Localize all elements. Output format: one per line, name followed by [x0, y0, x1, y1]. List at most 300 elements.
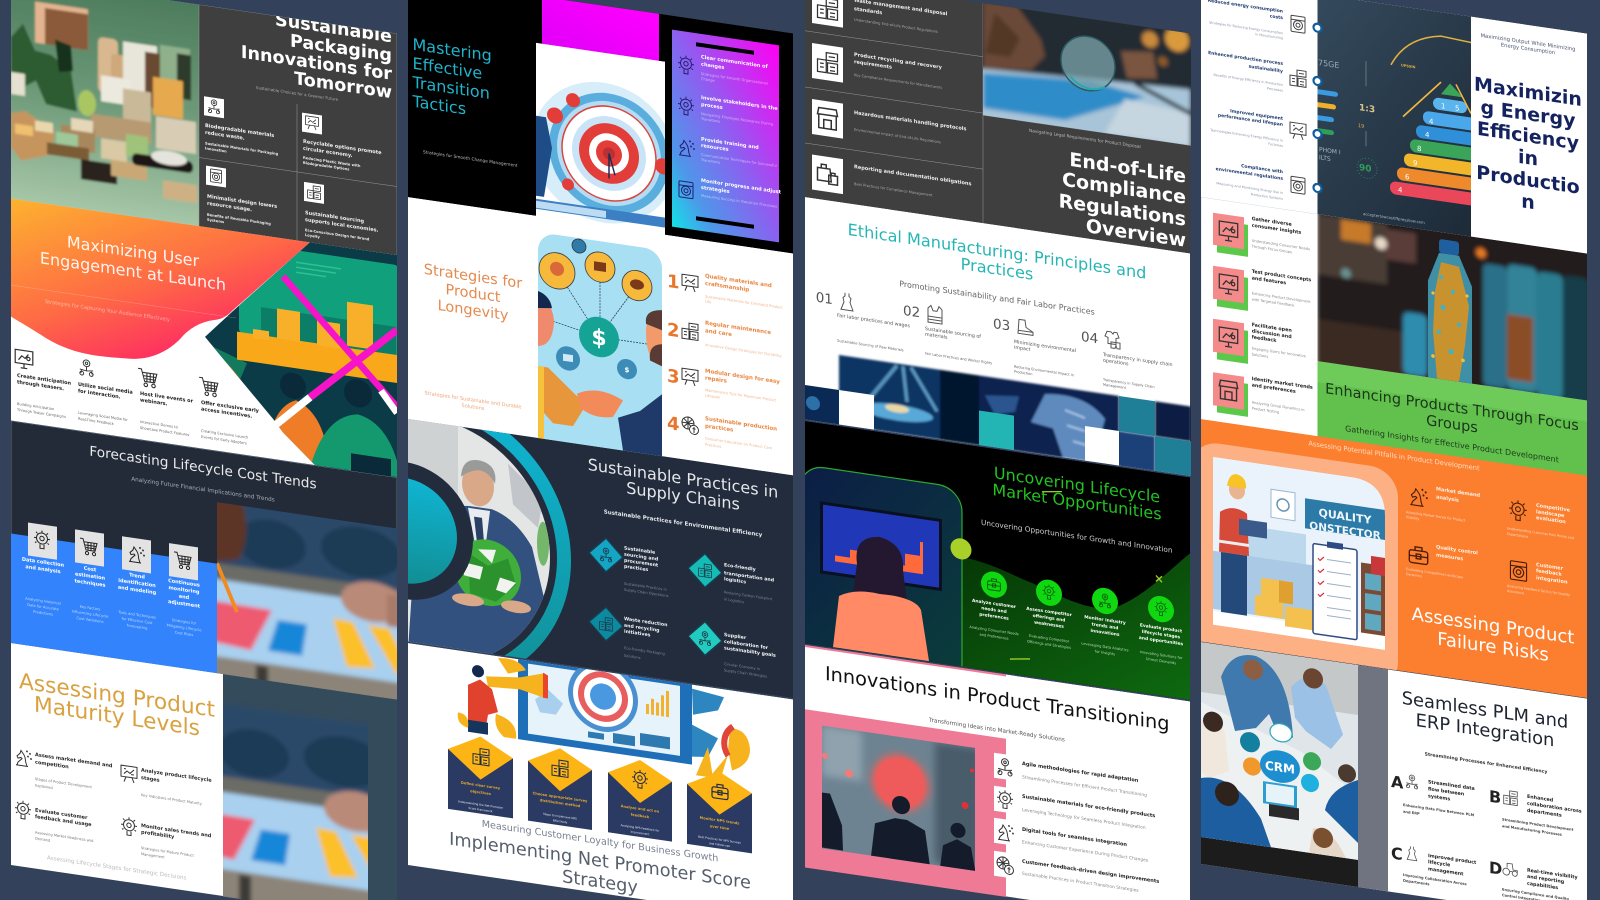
numbers — [816, 290, 1098, 347]
item text: supports local economies. — [305, 217, 379, 234]
item text — [16, 373, 260, 447]
item text: Assess market demand and — [35, 752, 113, 769]
item text: webinars. — [140, 397, 168, 407]
item text: Eco-friendly — [724, 562, 756, 573]
photo: energy pyramid dashboard: 4 — [1425, 130, 1430, 140]
item text: feedback — [1536, 568, 1562, 578]
NPS cards: Choose appropriate survey — [533, 791, 588, 803]
photo: plastic bottles — [1317, 209, 1592, 409]
item text: Assurance — [1507, 589, 1524, 595]
decorative accents — [1010, 484, 1162, 681]
item text: Analyzing Consumer Needs — [969, 625, 1019, 636]
item text: Transparency in supply chain — [1102, 352, 1173, 368]
item text: Interactive Demos to — [140, 420, 179, 430]
item text: Host live events or — [140, 391, 194, 405]
item text: Through Focus Groups — [1251, 244, 1292, 254]
left item list: Technologies Enhancing Energy Efficiency in — [1209, 128, 1283, 143]
item text: Facilitate open — [1252, 322, 1292, 334]
NPS cards: Analyzing NPS Feedback for — [621, 823, 660, 833]
item text: for Insights — [1095, 649, 1115, 656]
item text: and Preferences — [979, 633, 1009, 641]
item text: Analyze product lifecycle — [141, 768, 212, 784]
icons — [841, 292, 1120, 350]
panel: packaging benefits — [199, 0, 397, 256]
item text: Monitor industry — [1084, 614, 1126, 626]
item text: Continuous — [168, 578, 200, 589]
item text: Sustainable Materials for Packaging — [205, 141, 279, 156]
title: Enhancing Products Through Focus — [1325, 380, 1579, 434]
item text — [35, 752, 212, 866]
illustration: handshake network: $ — [625, 365, 630, 374]
item text: Improved product — [1428, 853, 1477, 866]
title: Productio — [1476, 161, 1580, 199]
photo: chart with pencil — [217, 502, 397, 700]
item text: Identify market trends — [1252, 376, 1313, 391]
photo: energy pyramid dashboard: 8 — [1417, 144, 1421, 153]
compliance rows: Environmental Impact of End-of-Life Regulations — [854, 128, 941, 144]
title: Packaging — [290, 31, 392, 66]
item text: Real-time visibility — [1527, 867, 1578, 881]
item text: procurement — [624, 558, 659, 569]
photo: energy pyramid dashboard: 1:3 — [1359, 103, 1375, 115]
gradient panel: Strategies for Smooth Organizational — [701, 72, 768, 86]
item text: Strategies for Mature Product — [141, 846, 194, 858]
item text: Consumer Education on Product Care — [705, 437, 773, 450]
numbers: 1 — [667, 271, 680, 294]
item text: Innovative Design Strategies for Durability — [705, 343, 782, 358]
NPS cards: distribution method — [540, 798, 581, 808]
item text: Assessing Market Trends for Product — [1406, 510, 1466, 523]
item text: Customer — [1536, 562, 1564, 572]
title: Overview — [1086, 214, 1186, 252]
item text — [1403, 776, 1582, 900]
item text: Gather diverse — [1252, 216, 1292, 228]
item text: Unmet Demands — [1146, 657, 1176, 665]
teal ring — [290, 383, 564, 697]
left item list: costs — [1270, 13, 1283, 21]
gradient panel: Transitions — [700, 117, 720, 124]
title: Forecasting Lifecycle Cost Trends — [89, 444, 317, 493]
item text: Competitive — [1536, 503, 1571, 514]
item text: identification — [118, 578, 156, 589]
item text: estimation — [75, 571, 105, 582]
item text: Key Factors — [80, 605, 100, 612]
gradient panel: Navigating Employee Resistance During — [701, 112, 773, 126]
item text: innovations — [1091, 628, 1120, 638]
icon tiles — [28, 522, 198, 580]
slide: Sustainable Practices in Supply Chains — [290, 383, 793, 730]
title: Compliance — [1062, 168, 1186, 209]
illustration: quality inspector: ONSTECTOR — [1309, 520, 1381, 542]
title: Engagement at Launch — [40, 248, 226, 294]
slide: Uncovering Lifecycle Market Opportunities — [800, 420, 1190, 721]
NPS cards: Improvement — [631, 830, 650, 836]
column 3 of slides — [800, 0, 1200, 900]
icon tiles — [994, 753, 1015, 879]
NPS cards: Steps to Implement NPS — [543, 812, 577, 821]
NPS cards: Understanding the Net Promoter — [458, 799, 504, 810]
item text: for interaction. — [78, 388, 121, 401]
magenta block — [542, 0, 659, 64]
numbers: 4 — [667, 413, 680, 436]
photo: energy pyramid dashboard: 90 — [1359, 163, 1372, 175]
photo: energy pyramid dashboard: 4 — [1429, 116, 1434, 126]
item text: through teasers. — [17, 379, 64, 392]
item text: landscape — [1536, 509, 1565, 519]
item text: Sustainable Materials for Extended Product — [705, 295, 783, 310]
left item list: Strategies for Reducing Energy Consumption — [1209, 21, 1283, 35]
item text: Stages of Product Development — [35, 777, 93, 789]
left item list — [1208, 0, 1322, 207]
item text: Quality materials and — [705, 274, 772, 289]
small teal circle — [336, 452, 473, 609]
icons — [15, 349, 218, 397]
item text: Agile methodologies for rapid adaptation — [1022, 761, 1139, 784]
subtitle: Strategies for Smooth Change Management — [423, 149, 518, 169]
item text: and care — [705, 328, 732, 338]
item text: sourcing and — [624, 552, 658, 563]
title — [412, 38, 490, 114]
item text: Enhancing Product Development — [1252, 291, 1311, 304]
gradient panel: process — [701, 102, 723, 111]
item text: feedback and usage — [35, 814, 92, 828]
title: n — [1521, 189, 1535, 214]
item text: and opportunities — [1139, 635, 1183, 647]
item text: Sustainable production — [705, 416, 777, 433]
column 1 of slides — [6, 0, 421, 900]
subtitle: Sustainable Choices for a Greener Future — [256, 85, 339, 102]
photo: energy pyramid dashboard: 5 — [1455, 103, 1459, 113]
pink strip — [805, 641, 1006, 676]
illustration: handshake network — [538, 232, 662, 480]
letters: A — [1391, 772, 1404, 793]
subheading: Sustainable Practices for Environmental Efficiency — [604, 509, 763, 539]
item text: adjustment — [168, 599, 201, 610]
item text — [705, 274, 783, 458]
item text: Life — [705, 300, 712, 305]
item text: Biodegradable materials — [205, 123, 274, 139]
letters — [1391, 772, 1502, 879]
title: Efficiency — [1477, 117, 1580, 155]
item text: Systems — [207, 218, 224, 224]
item text: Sustainable sourcing — [305, 210, 365, 225]
item text: Cost — [84, 566, 97, 574]
gradient panel: Measuring Success in Transition Processes — [701, 194, 777, 209]
NPS cards: objectives — [470, 789, 491, 796]
subtitle: Strategies for Capturing Your Audience Effectively — [45, 299, 170, 323]
item text — [22, 557, 202, 639]
item text: Influencing Lifecycle — [72, 609, 109, 619]
icons — [204, 96, 324, 204]
item text: competition — [35, 760, 69, 771]
item text: Mitigating Lifecycle — [167, 623, 202, 633]
title — [424, 264, 522, 322]
item text: reduce waste. — [205, 130, 245, 142]
item text: Solutions — [624, 654, 641, 660]
item text: for Effective Cost — [122, 617, 153, 625]
photo: energy pyramid dashboard: 75GE — [1318, 58, 1339, 70]
photo: chart close-up — [223, 705, 368, 900]
item text: Streamlined data — [1428, 779, 1475, 792]
item text: evaluation — [1536, 515, 1566, 525]
item text — [969, 597, 1183, 666]
item text: Offerings and Strategies — [1027, 640, 1071, 650]
item text: Sustainable Sourcing of Raw Materials — [837, 339, 904, 352]
item text: sustainability goals — [724, 645, 776, 659]
numbers: 04 — [1081, 329, 1098, 347]
item text: management — [1428, 866, 1464, 878]
gradient panel: Change — [701, 77, 716, 83]
photo: energy pyramid dashboard: acceptertowcostiffpressilow.com — [1363, 211, 1425, 225]
item text: Leveraging Data Analytics — [1081, 642, 1129, 652]
slide: Seamless PLM and ERP Integration — [1201, 642, 1587, 900]
item text: Lifespan — [705, 394, 720, 400]
item text: Improving Collaboration Across — [1403, 873, 1467, 886]
subtitle: Strategies for Sustainable and Durable — [425, 390, 521, 411]
title — [242, 16, 392, 98]
item text: flow between — [1428, 786, 1465, 798]
compliance rows: Reporting and documentation obligations — [854, 164, 971, 187]
item text: Departments — [1403, 879, 1429, 886]
title — [1059, 146, 1186, 252]
subtitle: Energy Consumption — [1501, 42, 1555, 56]
item text: Digital tools for seamless integration — [1022, 827, 1127, 848]
item text: Fair labor practices and wages — [837, 313, 911, 329]
item text: Evaluate customer — [35, 808, 88, 821]
item text: Customer feedback-driven design improvements — [1022, 859, 1159, 885]
item text: Offer exclusive early — [201, 400, 260, 414]
item text: Data collection — [22, 557, 65, 569]
item text: Dynamics — [1406, 572, 1422, 578]
item text: Analyzing Historical — [25, 597, 61, 606]
item text: Sustainable Practices in — [624, 582, 667, 592]
title: Effective — [412, 54, 482, 83]
NPS cards: Effectively — [553, 818, 568, 824]
item text: and Manufacturing Processes — [1502, 824, 1562, 837]
subheading: Streamlining Processes for Enhanced Efficiency — [1425, 751, 1547, 775]
item text: collaboration across — [1527, 801, 1582, 815]
title: Longevity — [438, 297, 509, 324]
title — [1474, 72, 1582, 221]
gradient panel: Transitions — [700, 158, 720, 165]
title: g Energy — [1481, 95, 1576, 132]
item text: Engaging Users for Innovative — [1252, 346, 1307, 358]
gradient banner — [11, 198, 310, 359]
item text: Create anticipation — [17, 373, 71, 387]
title: Failure Risks — [1437, 629, 1549, 666]
title: Innovations in Product Transitioning — [825, 662, 1169, 735]
item text: Product Testing — [1252, 406, 1279, 414]
item text: access incentives. — [201, 406, 252, 420]
photo panel: woman viewing screen — [800, 464, 962, 688]
NPS cards: Best Practices for NPS Surveys — [698, 835, 741, 845]
slide: Enhancing Products Through Focus Groups — [1201, 192, 1592, 478]
diamond glyphs — [600, 547, 711, 646]
item text: Showcase Product Features — [140, 426, 189, 437]
item text — [1406, 482, 1574, 603]
photo: energy pyramid dashboard: 4 — [1398, 185, 1403, 195]
item text: Transparency in Supply Chain — [1102, 378, 1155, 389]
NPS cards: Score Framework — [468, 806, 493, 813]
title — [1412, 604, 1574, 670]
icons — [1409, 485, 1527, 581]
numbers: 03 — [993, 316, 1010, 335]
compliance rows: Hazardous materials handling protocols — [854, 110, 966, 132]
subtitle: Promoting Sustainability and Fair Labor Practices — [899, 279, 1095, 317]
item text: Real-Time Feedback — [78, 417, 115, 426]
icons — [1406, 774, 1517, 877]
item text: impact — [1014, 345, 1031, 353]
item text: Creating Exclusive Launch — [201, 429, 248, 440]
icons — [15, 750, 137, 836]
item text: collaboration for — [724, 639, 769, 651]
item text: Supplier — [724, 632, 747, 641]
item text: repairs — [705, 376, 728, 385]
letters: C — [1391, 843, 1403, 864]
title: Strategies for — [424, 261, 522, 292]
left item list: sustainability — [1249, 64, 1283, 75]
gradient panel: Monitor progress and adjust — [701, 178, 782, 196]
item text: Understanding Consumer Needs — [1252, 239, 1310, 251]
item text: needs and — [981, 605, 1007, 615]
column 4 of slides — [1191, 0, 1592, 900]
item text: Enhanced — [1527, 794, 1554, 804]
slide: Strategies for Product Longevity — [408, 197, 793, 499]
title — [1402, 688, 1568, 753]
left item list: performance and lifespan — [1218, 112, 1283, 128]
item text: Trend — [129, 572, 145, 581]
illustration: quality inspector — [1213, 457, 1385, 652]
illustration: handshake network: $ — [591, 324, 607, 352]
item text: Evaluating Competitive Landscape — [1406, 567, 1463, 579]
NPS cards: over time — [710, 824, 730, 831]
item text: Modular design for easy — [705, 369, 780, 386]
item text: Reducing Environmental Impact in — [1014, 365, 1074, 377]
item text: Waste reduction — [624, 616, 667, 628]
photo: energy pyramid dashboard: PHOM I — [1319, 146, 1341, 156]
title: Market Opportunities — [992, 480, 1162, 524]
item text: Sustainable — [624, 545, 655, 556]
item text: Enhancing Data Flow Between PLM — [1403, 803, 1475, 817]
title: Strategy — [562, 866, 638, 898]
photo: energy pyramid dashboard: UPSSIN — [1401, 63, 1416, 69]
item text: Reducing Plastic Waste with — [303, 156, 361, 168]
column 2 of slides — [408, 0, 793, 900]
pink X — [283, 276, 397, 410]
item text: feedback — [1252, 334, 1277, 344]
item text: with Targeted Feedback — [1252, 297, 1295, 308]
item text: and preferences — [1252, 382, 1296, 395]
item text: Predictions — [33, 610, 53, 617]
item text — [1251, 216, 1313, 419]
item text: Analyzing Group Dynamics in — [1252, 400, 1305, 412]
item text: Assess competitor — [1026, 606, 1073, 618]
subtitle: Transforming Ideas into Market-Ready Solutions — [928, 718, 1065, 744]
title: Supply Chains — [626, 478, 740, 514]
item text: integration — [1536, 575, 1568, 586]
lighter panel — [1191, 440, 1398, 690]
gradient panel: Communication Techniques for Successful — [701, 153, 777, 168]
item text: weaknesses — [1034, 620, 1064, 630]
item text: Benefits of Reusable Packaging — [207, 213, 271, 226]
gradient panel — [672, 30, 782, 243]
title: Mastering — [412, 35, 492, 65]
left item list: Compliance with — [1241, 163, 1283, 175]
pink panel — [805, 709, 1006, 899]
gradient panel: strategies — [701, 185, 730, 195]
NPS cards: and Follow-ups — [709, 841, 730, 848]
item text: Regular maintenance — [705, 321, 771, 336]
item text: capabilities — [1527, 881, 1558, 891]
title: Ethical Manufacturing: Principles and — [848, 220, 1146, 283]
item text: Biodegradable Options — [303, 161, 349, 172]
subtitle: Navigating Legal Requirements for Product Disposal — [1029, 128, 1141, 150]
item text: stages — [141, 775, 160, 784]
item text: Analyzing Feedback Tactics for Quality — [1507, 584, 1570, 597]
item text — [1022, 761, 1159, 897]
diamond icons — [589, 536, 722, 658]
white gaps — [274, 388, 397, 427]
title: Product — [445, 281, 501, 306]
left item list: Factories — [1268, 142, 1283, 148]
footer note: Assessing Lifecycle Stages for Strategic Decisions — [47, 855, 187, 882]
left item list: Improved equipment — [1230, 108, 1284, 122]
photo: team around CRM table — [1201, 642, 1358, 860]
item text: Eco-friendly Packaging — [624, 646, 665, 656]
NPS cards: Analyze and act on — [621, 804, 660, 814]
compliance rows: Product recycling and recovery — [854, 52, 943, 71]
NPS cards: Define clear survey — [461, 781, 501, 791]
slide: Mastering Effective Transition Tactics — [408, 0, 793, 255]
item text: Minimizing environmental — [1014, 339, 1076, 354]
item text: Enhancing Customer Experience During Product Changes — [1022, 839, 1149, 864]
item text: Events for Early Adopters — [201, 435, 247, 446]
illustration: quality inspector: QUALITY — [1319, 506, 1372, 527]
compliance rows: Best Practices for Compliance Management — [854, 182, 933, 198]
item text: Management — [141, 852, 165, 860]
title: ERP Integration — [1416, 710, 1554, 751]
title: Assessing Product — [1412, 604, 1574, 649]
item text: Assessing Market Readiness and — [35, 831, 93, 843]
title: Implementing Net Promoter Score — [449, 829, 751, 894]
title: Maximizing User — [67, 232, 199, 271]
numbers: 2 — [667, 320, 680, 342]
title: Maturity Levels — [34, 692, 200, 742]
compliance rows: Key Compliance Requirements for Manufacturers — [854, 73, 942, 90]
item text: Production — [1014, 370, 1033, 376]
gradient panel: resources — [701, 143, 729, 153]
title: Uncovering Lifecycle — [994, 463, 1160, 507]
title: Regulations — [1059, 189, 1186, 231]
item text: Demand — [35, 837, 50, 843]
item text: Eco-Conscious Design for Brand — [305, 228, 370, 242]
photo: energy pyramid dashboard: 19 — [1358, 123, 1364, 130]
photo: executive holding recycling globe — [298, 393, 558, 673]
item text: practices — [624, 564, 648, 573]
title: Innovations for — [241, 43, 392, 85]
NPS cards — [448, 732, 752, 853]
title: End-of-Life — [1069, 148, 1186, 188]
item text: Evaluating Competitor — [1029, 634, 1070, 644]
gradient panel: Provide training and — [701, 137, 759, 151]
subtitle: Uncovering Opportunities for Growth and Innovation — [981, 518, 1173, 555]
item text: Leveraging Social Media for — [78, 411, 128, 422]
item text: Viability — [1406, 515, 1419, 521]
item text: logistics — [724, 576, 746, 586]
compliance rows — [812, 0, 971, 213]
item text: Practices — [705, 443, 721, 449]
item text: in Logistics — [724, 597, 744, 604]
